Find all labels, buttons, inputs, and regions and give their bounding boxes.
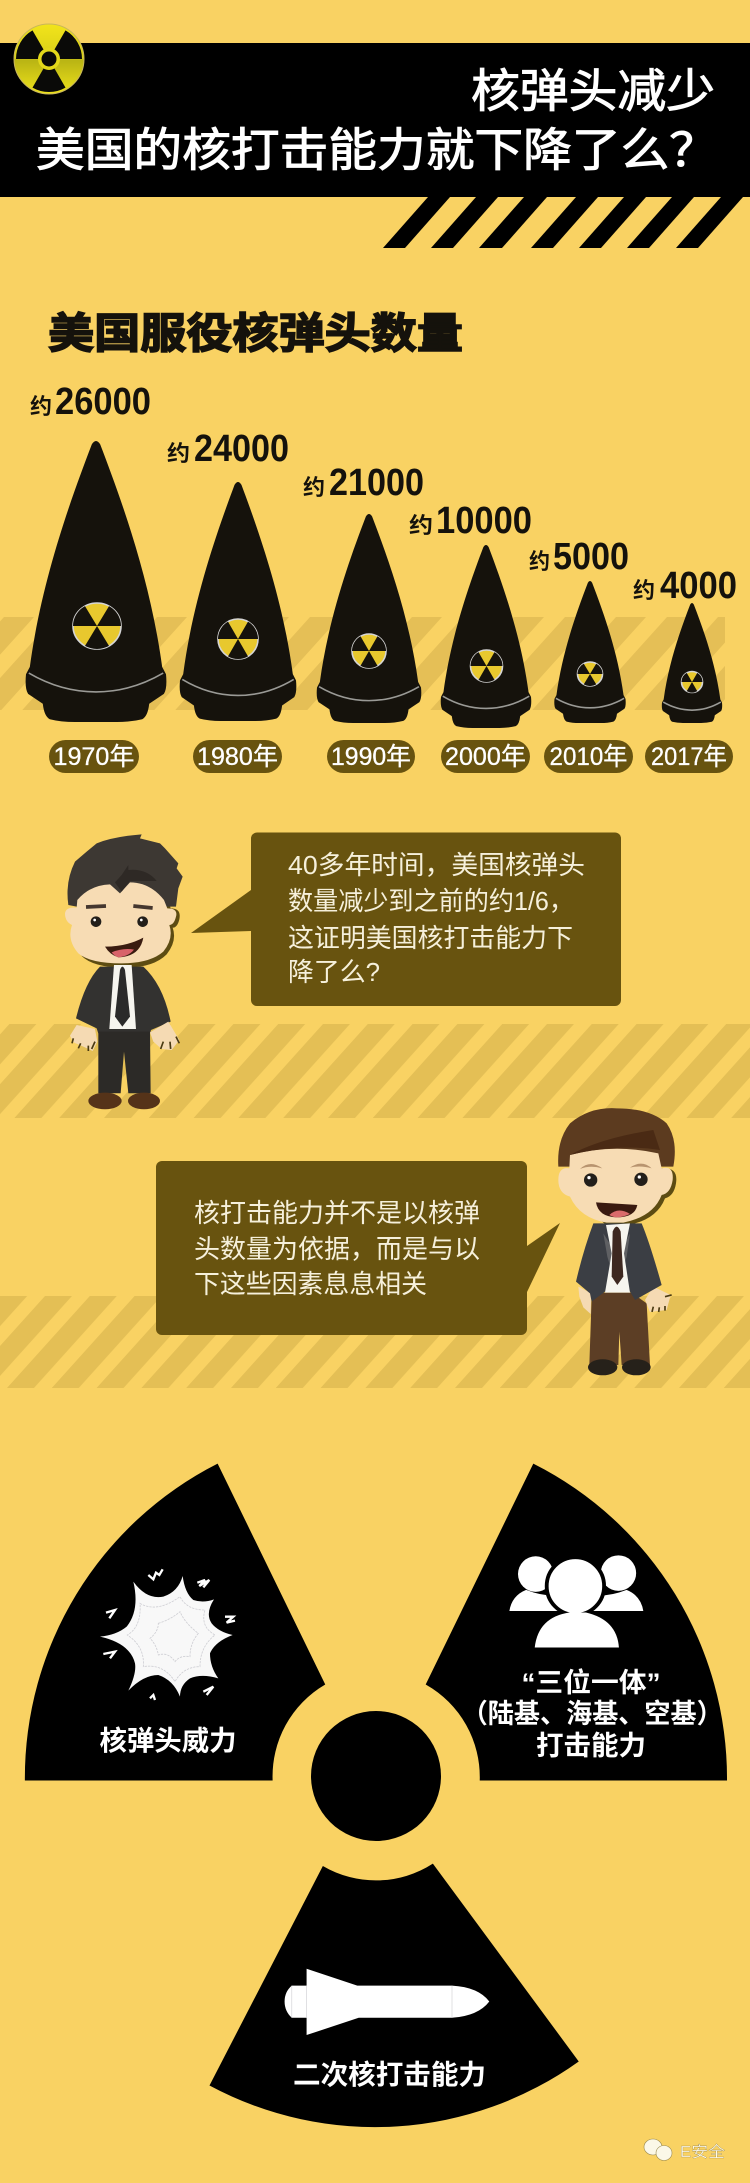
pants: [589, 1293, 650, 1365]
eyes: [584, 1173, 597, 1187]
face: [65, 882, 176, 963]
lapels: [603, 1233, 630, 1280]
speech bubble 2: [156, 1161, 560, 1335]
label: “三位一体”: [522, 1667, 660, 1698]
tie: [115, 967, 130, 1027]
character: man with dark hair: [65, 834, 183, 1109]
warhead 2000: 2000年: [445, 743, 526, 771]
eyebrows: [86, 906, 153, 908]
title: 核弹头减少: [471, 65, 715, 117]
hands: [70, 1025, 97, 1051]
warhead 1970: 26000: [55, 381, 151, 423]
jacket: [76, 967, 171, 1033]
jacket: [576, 1223, 662, 1302]
bubble 1 text: [288, 850, 585, 987]
icon: explosion: [100, 1569, 235, 1700]
warhead 2000: 10000: [436, 500, 532, 542]
speech bubble 1: [191, 832, 621, 1006]
hair: [558, 1108, 675, 1167]
panel: second strike: [209, 1864, 579, 2127]
background stripes behind warheads: [0, 617, 725, 710]
eyebrows: [580, 1164, 652, 1169]
watermark: E安全: [680, 2143, 726, 2161]
warhead 1990: 1990年: [331, 743, 411, 771]
hair: [67, 834, 183, 907]
background stripes band 3: [0, 1296, 750, 1388]
warhead 1970: 约: [30, 394, 52, 419]
warhead 2017: 约: [633, 578, 655, 603]
label: [462, 1667, 723, 1761]
panel: triad capability: [426, 1464, 727, 1781]
bubble 2 text: 下这些因素息息相关: [194, 1269, 427, 1299]
face: [558, 1149, 673, 1223]
title: [36, 65, 718, 176]
icon: wechat: [644, 2139, 672, 2160]
hazard stripes under banner: [383, 197, 743, 248]
chart: warhead count by year: [26, 381, 737, 773]
panel: warhead power: [25, 1464, 325, 1781]
hair streak: [570, 1130, 660, 1155]
bubble 1 text: 这证明美国核打击能力下: [288, 923, 573, 953]
icon: radiation logo: [14, 24, 84, 94]
right hand: [645, 1287, 671, 1312]
header banner: [0, 43, 750, 248]
shoes: [88, 1093, 122, 1109]
warhead 1990: [303, 462, 424, 773]
label: （陆基、海基、空基）: [462, 1699, 723, 1729]
warhead 2017: 4000: [660, 565, 737, 607]
forelock: [115, 865, 157, 892]
bubble 1 text: 数量减少到之前的约1/6，: [288, 886, 574, 916]
warhead 1970: [26, 381, 166, 773]
label: 核弹头威力: [100, 1725, 236, 1756]
warhead 2000: [409, 500, 532, 773]
tie: [612, 1227, 623, 1285]
warhead 2017: 2017年: [651, 743, 727, 771]
pants: [98, 1032, 151, 1093]
label: 打击能力: [536, 1731, 646, 1761]
warhead 2017: [633, 565, 737, 773]
bubble 1 text: 40多年时间，美国核弹头: [288, 850, 585, 880]
warhead 2000: 约: [409, 513, 433, 538]
eyes: [91, 916, 101, 927]
mouth: [105, 938, 143, 957]
bubble 2 text: 头数量为依据，而是与以: [194, 1234, 480, 1264]
warhead 2010: [529, 536, 633, 773]
bubble 1 text: 降了么?: [288, 957, 380, 987]
title: 美国的核打击能力就下降了么？: [36, 124, 718, 176]
bubble 2 text: [194, 1198, 480, 1299]
bubble 2 text: 核打击能力并不是以核弹: [194, 1198, 480, 1228]
warhead 1990: 21000: [329, 462, 424, 504]
icon: missile: [285, 1969, 489, 2035]
radiation diagram: [25, 1464, 727, 2127]
mouth: [596, 1202, 637, 1217]
warhead 1970: 1970年: [54, 743, 134, 771]
warhead 1990: 约: [303, 475, 325, 500]
warhead 2010: 5000: [553, 536, 629, 578]
background stripes band 2: [0, 1024, 750, 1118]
warhead 1980: 24000: [194, 428, 289, 470]
shoes: [588, 1359, 617, 1375]
center circle: [311, 1711, 441, 1841]
warhead 1980: [167, 428, 296, 773]
warhead 2010: 2010年: [550, 743, 628, 771]
warhead 1980: 1980年: [197, 743, 278, 771]
section heading: 美国服役核弹头数量: [48, 310, 463, 357]
shirt: [109, 965, 136, 1029]
shirt: [605, 1223, 630, 1293]
watermark: [644, 2139, 726, 2161]
icon: three people: [509, 1555, 643, 1648]
label: 二次核打击能力: [293, 2059, 486, 2090]
left hand: [578, 1287, 591, 1314]
warhead 1980: 约: [167, 441, 190, 466]
character: man with brown hair: [558, 1108, 676, 1375]
warhead 2010: 约: [529, 549, 550, 574]
